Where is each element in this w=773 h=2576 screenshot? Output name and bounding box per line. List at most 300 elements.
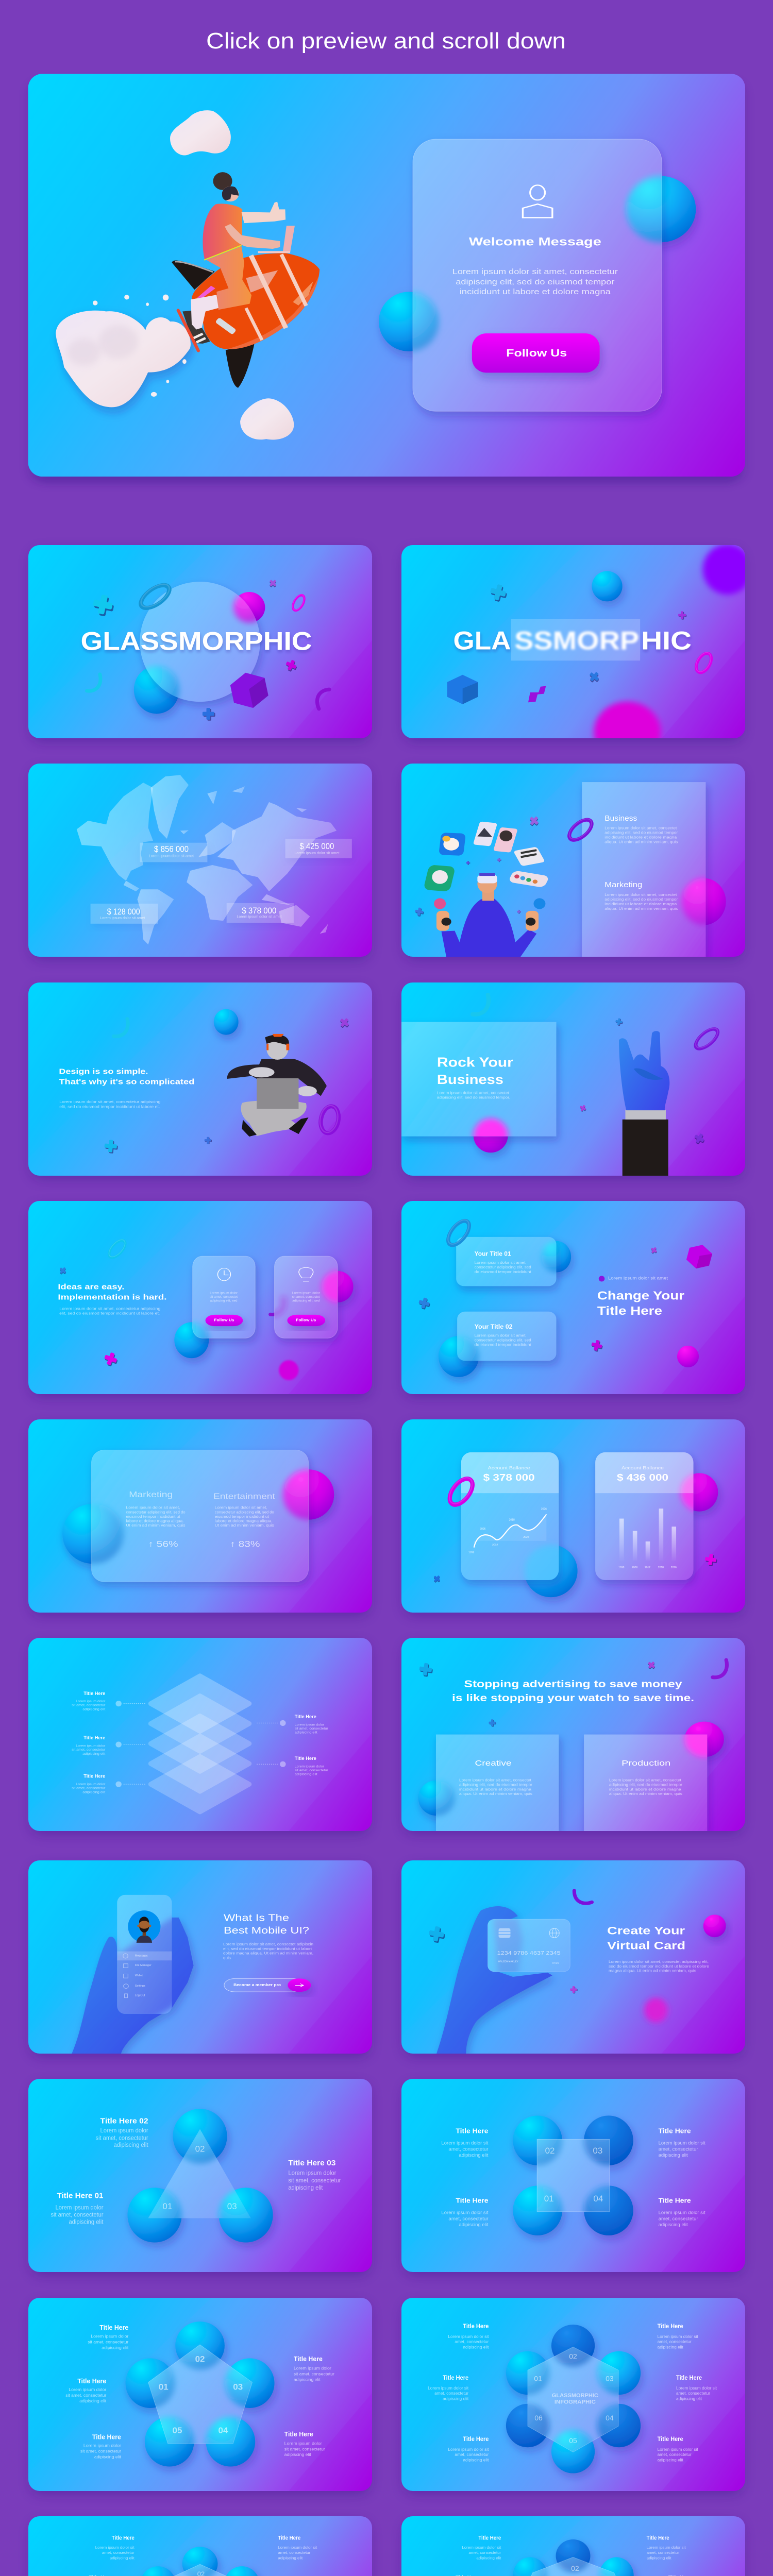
heading: quote — [452, 1679, 694, 1704]
menu: phone items: Wallet — [135, 1974, 143, 1977]
text block: creative body: incididunt ut labore et dolore magna — [459, 1787, 532, 1791]
text block: marketing — [604, 880, 678, 911]
text block: bulb body: Lorem ipsum dolor — [292, 1291, 321, 1295]
text block: rock body: Lorem ipsum dolor sit amet, consectet — [437, 1090, 510, 1095]
label: title 03 — [288, 2159, 341, 2191]
label: title 02: Title Here 02 — [100, 2117, 148, 2126]
icon: blurred magenta sphere — [644, 1998, 668, 2023]
text block: marketing: incididunt ut labore et dolore magna — [604, 902, 677, 906]
label: title 01 — [51, 2192, 104, 2226]
text block: design body — [59, 1099, 160, 1109]
panel: glass card bar chart — [401, 1419, 745, 1613]
stat: 56 percent: ↑ 56% — [148, 1539, 178, 1549]
label: bottom right: amet, consectetur — [659, 2216, 698, 2222]
heading: rock your business: Business — [437, 1072, 503, 1087]
icon: purple hexagon — [228, 669, 270, 711]
title: Click on preview and scroll down — [206, 28, 566, 54]
number: 01: 01 — [544, 2194, 554, 2204]
text block: mobile body: elit, sed do eiusmod tempor incididunt ut labort — [223, 1946, 312, 1951]
marker: right 2 — [257, 1761, 286, 1767]
label: bottom left: Lorem ipsum dolor sit — [441, 2210, 489, 2215]
label: title 02: adipiscing elit — [114, 2142, 148, 2148]
heading: quote: Stopping advertising to save money — [464, 1679, 682, 1690]
heading: sharp end: HIC — [641, 626, 692, 655]
panel: slide design is simple — [28, 982, 372, 1179]
text block: design quote: Design is so simple. — [59, 1067, 148, 1076]
panel: slide world map — [28, 764, 372, 960]
label: 02: adipiscing elit — [102, 2345, 129, 2350]
label: 01: sit amet, consectetur — [65, 2393, 106, 2398]
panel: glass column — [401, 764, 745, 957]
heading: best mobile ui: What Is The — [224, 1912, 289, 1923]
text block: production: Production — [621, 1759, 670, 1768]
chart: bar chart: 2012 — [645, 1566, 650, 1569]
panel: glass circle — [28, 545, 372, 738]
label: 04: adipiscing elit — [284, 2452, 311, 2457]
text block: clock body — [210, 1291, 238, 1302]
label: 04: sit amet, consectetur — [284, 2446, 325, 2451]
label: left 2: sit amet, consectetur — [72, 1748, 106, 1752]
panel: slide glassmorphic circle — [28, 545, 372, 742]
icon: magenta ring — [693, 650, 715, 675]
label: left 1: sit amet, consectetur — [72, 1704, 106, 1707]
text block: title 02: do eiusmod tempor incididunt — [475, 1342, 531, 1347]
icon: blue sphere — [62, 1504, 124, 1564]
chart: line chart: 2018 — [509, 1518, 515, 1521]
illustration: hand — [72, 1918, 194, 2054]
label: 03: amet, consectetur — [647, 2550, 679, 2555]
label: 03 — [278, 2535, 317, 2560]
icon: top cloud — [170, 110, 231, 156]
illustration: rock hand — [619, 1031, 669, 1177]
panel: glass square — [401, 2079, 745, 2272]
button: follow us — [287, 1315, 325, 1326]
text block: marketing: Marketing — [604, 880, 642, 889]
panel: slide pentagon infographic — [28, 2298, 372, 2495]
callout: 425 000: $ 425 000 — [299, 841, 334, 851]
label: bottom right: adipiscing elit — [659, 2222, 688, 2228]
chart: line chart: 2012 — [492, 1544, 498, 1547]
text block: balance: $ 378 000 — [483, 1472, 535, 1483]
text block: marketing: Lorem ipsum dolor sit amet, consectet — [604, 892, 677, 897]
icon: magenta sphere — [474, 1118, 508, 1153]
illustration: vr person — [414, 858, 545, 957]
icon: magenta sphere — [233, 592, 265, 623]
panel: slide virtual card — [401, 1860, 745, 2057]
panel: slide business marketing — [401, 764, 745, 960]
label: 06 — [448, 2435, 489, 2463]
text block: clock body: sit amet, consectet — [210, 1295, 238, 1299]
marker: left 1 — [115, 1701, 146, 1706]
callout: 128 000 — [91, 904, 158, 924]
icon: chip — [499, 1928, 510, 1938]
text block: ideas body — [59, 1306, 160, 1315]
icon: blue hexagon — [447, 675, 478, 704]
icon: magenta sphere — [681, 1473, 718, 1512]
heading: rock your business: Rock Your — [437, 1055, 513, 1070]
label: left 2: adipiscing elit — [82, 1752, 105, 1756]
text block: design body: Lorem ipsum dolor sit amet, consectetur adipiscing — [59, 1099, 160, 1104]
label: 04: adipiscing elit — [676, 2397, 702, 2401]
label: title 03: adipiscing elit — [288, 2185, 323, 2191]
text block: business: Lorem ipsum dolor sit amet, consectet — [604, 826, 677, 831]
panel: glass card line chart — [401, 1419, 745, 1613]
number: 02: 02 — [195, 2144, 205, 2154]
label: left 1: adipiscing elit — [82, 1707, 105, 1711]
label: 04 — [284, 2430, 325, 2457]
text block: title 01: do eiusmod tempor incididunt — [475, 1269, 531, 1274]
icon: teal plus — [91, 593, 116, 618]
icon: purple plus — [570, 1986, 578, 1993]
number: 02: 02 — [545, 2146, 555, 2156]
icon: blurred purple sphere — [703, 544, 752, 595]
label: left 2: Title Here — [83, 1735, 105, 1741]
callout: 425 000 — [285, 839, 352, 858]
panel: hero slide — [28, 74, 745, 483]
label: 05: adipiscing elit — [658, 2458, 683, 2463]
icon: blue cross — [432, 1574, 442, 1584]
button: follow us — [206, 1315, 243, 1326]
marker: left 2 — [115, 1741, 146, 1748]
panel: slide stopping advertising — [401, 1638, 745, 1835]
heading: glassmorphic: GLASSMORPHIC — [80, 627, 312, 656]
icon: purple crescent — [315, 689, 332, 709]
text block: creative: Creative — [475, 1759, 512, 1768]
text block: marketing body: Lorem ipsum dolor sit amet, — [126, 1505, 180, 1510]
text block: balance: Account Ballance — [488, 1466, 530, 1470]
heading: sharp start: GLA — [453, 626, 511, 655]
numbers: hexagon: 05 — [569, 2436, 577, 2445]
icon: blue sphere — [592, 571, 623, 601]
label: 02: Title Here — [463, 2323, 489, 2330]
text block: design body: elit, sed do eiusmod tempor incididunt ut labore et. — [59, 1105, 160, 1109]
label: 03: Title Here — [278, 2535, 300, 2541]
label: 02: amet, consectetur — [102, 2550, 135, 2555]
text block: creative body: adipiscing elit, sed do eiusmod tempor — [459, 1783, 533, 1787]
text block: card body — [609, 1959, 709, 1973]
text block: kicker: Lorem ipsum dolor sit amet — [608, 1276, 668, 1281]
text block: marketing body — [126, 1505, 186, 1528]
panel: slide layers — [28, 1638, 372, 1835]
icon: spheres — [494, 2539, 651, 2576]
panel: slide square infographic — [401, 2079, 745, 2276]
icon: magenta sphere — [682, 878, 726, 925]
callout: 378 000: Lorem ipsum dolor sit amet — [237, 916, 281, 919]
text block: cardholder: ORLEEN MAKLEY — [498, 1960, 518, 1962]
label: left 2: Lorem ipsum dolor — [76, 1744, 106, 1748]
label: left 2 — [72, 1735, 106, 1756]
text block: welcome body: incididunt ut labore et dolore magna — [460, 287, 611, 296]
label: top left: adipiscing elit — [459, 2153, 489, 2158]
label: top left: amet, consectetur — [448, 2146, 488, 2152]
chart: line chart: 2006 — [480, 1528, 486, 1531]
label: title 02: sit amet, consectetur — [96, 2135, 148, 2141]
text block: business: aliqua. Ut enim ad minim veniam, quis — [604, 839, 678, 844]
label: 01: Title Here — [77, 2377, 106, 2385]
stat: 83 percent: ↑ 83% — [230, 1539, 260, 1549]
icon: cyan plus — [418, 1662, 433, 1677]
text block: mobile body: quis — [223, 1955, 231, 1960]
label: 02 — [95, 2535, 135, 2560]
text block: card number: 1234 9786 4637 2345 — [497, 1951, 561, 1956]
icon: blue plus — [203, 708, 215, 721]
icon: magenta sphere — [703, 1914, 726, 1937]
callout: 378 000 — [227, 903, 294, 923]
icon: magenta hexagon — [685, 1242, 714, 1272]
icon: purple ring — [317, 1104, 341, 1135]
icon: magenta plus — [284, 658, 299, 673]
text block: business: adipiscing elit, sed do eiusmod tempor — [604, 831, 678, 835]
label: right 2: sit amet, consectetur — [295, 1769, 329, 1772]
label: top left: Lorem ipsum dolor sit — [441, 2140, 489, 2146]
icon: blue sphere left — [379, 292, 439, 351]
number: 01: 01 — [162, 2201, 172, 2211]
label: 01: adipiscing elit — [443, 2397, 469, 2401]
icon: cyan crescent — [114, 1019, 128, 1037]
label: 01: Title Here — [443, 2374, 468, 2381]
text block: mobile body: dolore magna aliqua. Ut enim ad minim veniam, — [223, 1951, 313, 1956]
panel: glass pentagon — [28, 2298, 372, 2491]
heading: virtual card — [607, 1925, 685, 1952]
label: 05 — [658, 2435, 698, 2463]
icon: blue sphere — [214, 1009, 239, 1035]
panel: glass square — [401, 982, 745, 1176]
label: 03: Lorem ipsum dolor sit — [278, 2545, 317, 2550]
icon: purple crescent — [270, 1298, 284, 1314]
text block: production body — [609, 1778, 683, 1796]
panel: glass credit card — [401, 1860, 745, 2054]
button: become member — [224, 1978, 311, 1992]
panel: slide ideas are easy — [28, 1201, 372, 1398]
icon: small plus — [678, 612, 686, 620]
label: title 01: adipiscing elit — [69, 2219, 104, 2226]
label: 03: amet, consectetur — [658, 2340, 692, 2344]
label: 06: Lorem ipsum dolor sit — [448, 2447, 489, 2452]
illustration: app icons — [423, 821, 550, 892]
icon: blue sphere right — [626, 176, 696, 242]
label: left 1 — [72, 1691, 106, 1711]
text block: marketing body: consectetur adipiscing elit, sed do — [126, 1510, 185, 1515]
heading: rock your business — [437, 1055, 513, 1087]
panel: glass welcome card — [28, 74, 745, 477]
text block: production body: incididunt ut labore et dolore magna — [609, 1787, 682, 1791]
icon: cyan crescent — [473, 995, 489, 1014]
icon: blue sphere — [524, 1545, 578, 1597]
chart: line chart: 1998 — [468, 1551, 474, 1554]
label: 02: sit amet, consectetur — [88, 2339, 128, 2344]
text block: design quote — [59, 1067, 194, 1087]
illustration: hand — [436, 1906, 552, 2054]
label: bottom right: Lorem ipsum dolor sit — [659, 2210, 705, 2215]
label: title 02: Lorem ipsum dolor — [100, 2128, 148, 2134]
label: 02: Lorem ipsum dolor sit — [462, 2545, 501, 2550]
panel: glass heptagon — [28, 2516, 372, 2576]
label: right 2: Lorem ipsum dolor — [295, 1765, 325, 1768]
text block: ideas body: elit, sed do eiusmod tempor incididunt ut labore et. — [59, 1311, 160, 1315]
label: 04: amet, consectetur — [676, 2391, 710, 2396]
button: follow us: Follow Us — [296, 1318, 316, 1323]
text block: clock body: Lorem ipsum dolor — [210, 1291, 238, 1295]
icon: purple cross — [649, 1246, 659, 1255]
icon: bulb — [299, 1267, 313, 1281]
panel: glass card clock — [28, 1201, 372, 1394]
text block: entertainment body — [215, 1505, 274, 1528]
label: 05: adipiscing elit — [94, 2454, 122, 2459]
icon: blurred magenta sphere — [279, 1360, 298, 1380]
illustration: rocket and rider — [172, 172, 320, 388]
text block: marketing body: eiusmod tempor incididunt ut — [126, 1514, 180, 1519]
text block: entertainment body: consectetur adipiscing elit, sed do — [215, 1510, 274, 1515]
heading: welcome message: Welcome Message — [469, 235, 601, 248]
label: 02 — [448, 2323, 489, 2350]
heading: center text: INFOGRAPHIC — [554, 2399, 596, 2405]
text block: entertainment body: eiusmod tempor incididunt ut — [215, 1514, 270, 1519]
icon: zigzag — [528, 686, 546, 702]
panel: glass creative — [401, 1638, 745, 1832]
text block: expiry: 07/26 — [552, 1962, 559, 1965]
icon: purple ring — [692, 1025, 721, 1052]
text block: marketing body: Ut enim ad minim veniam, quis — [126, 1523, 186, 1528]
menu: phone items: Messages — [135, 1955, 148, 1958]
panel: glass card bulb — [28, 1201, 372, 1394]
label: title 03: Title Here 03 — [288, 2159, 335, 2167]
label: 03: amet, consectetur — [278, 2550, 311, 2555]
panel: glass phone — [28, 1860, 372, 2054]
text block: entertainment body: labore et dolore magna aliqua. — [215, 1518, 273, 1523]
label: right 2 — [295, 1756, 329, 1776]
icon: spheres — [130, 2547, 270, 2576]
label: 06: amet, consectetur — [455, 2452, 489, 2457]
icon: magenta sphere — [677, 1346, 699, 1367]
panel: slide triangle infographic — [28, 2079, 372, 2276]
chart: bar chart: 2026 — [671, 1566, 677, 1569]
label: 02: adipiscing elit — [476, 2555, 501, 2560]
label: 02: adipiscing elit — [463, 2345, 489, 2350]
numbers: pentagon: 04 — [219, 2426, 228, 2435]
label: 02: amet, consectetur — [455, 2340, 489, 2344]
icon: spheres — [126, 2321, 275, 2467]
text block: production body: adipiscing elit, sed do eiusmod tempor — [609, 1783, 683, 1787]
panel: slide marketing entertainment — [28, 1419, 372, 1616]
chart: stacked glass layers — [150, 1676, 249, 1812]
label: bottom left: amet, consectetur — [448, 2216, 488, 2222]
label: right 2: Title Here — [295, 1756, 316, 1761]
label: left 3: adipiscing elit — [82, 1790, 105, 1794]
text block: marketing: adipiscing elit, sed do eiusmod tempor — [604, 897, 678, 902]
icon: magenta plus — [590, 1339, 604, 1353]
panel: glass card — [28, 1419, 372, 1613]
icon: blue sphere bottom — [439, 1336, 479, 1377]
label: 04 — [676, 2374, 717, 2401]
icon: blue plus — [417, 1297, 431, 1311]
text block: business: Business — [604, 814, 637, 823]
label: title 01: sit amet, consectetur — [51, 2212, 104, 2218]
text block: marketing: aliqua. Ut enim ad minim veniam, quis — [604, 906, 678, 911]
chart: bar chart — [618, 1509, 677, 1569]
label: 03 — [647, 2535, 686, 2560]
panel: slide glass blur title — [401, 544, 752, 763]
panel: glass octagon — [401, 2516, 745, 2576]
text block: title 02 — [475, 1323, 531, 1347]
callout: 378 000: $ 378 000 — [242, 906, 276, 916]
text block: ideas quote: Implementation is hard. — [58, 1293, 166, 1301]
callout: 425 000: Lorem ipsum dolor sit amet — [294, 852, 339, 855]
label: 01: Lorem ipsum dolor sit — [428, 2386, 469, 2391]
icon: blurred magenta sphere — [594, 702, 661, 763]
icon: bottom cloud — [240, 398, 294, 440]
heading: change your title — [597, 1289, 684, 1317]
icon: blue cross — [58, 1266, 68, 1276]
text block: production body: Lorem ipsum dolor sit amet, consectet — [609, 1778, 681, 1783]
number: 03: 03 — [227, 2201, 237, 2211]
text block: title 02: consectetur adipiscing elit, sed — [475, 1337, 531, 1342]
label: 05: Lorem ipsum dolor sit — [658, 2447, 698, 2452]
icon: cyan plus — [104, 1139, 119, 1154]
icon: purple crescent — [713, 1660, 727, 1677]
icon: plus — [527, 814, 541, 828]
number: 04: 04 — [593, 2194, 603, 2204]
text block: title 02: Your Title 02 — [475, 1323, 513, 1330]
heading: virtual card: Virtual Card — [607, 1940, 685, 1952]
panel: glass title 02 — [401, 1201, 745, 1394]
icon: globe — [549, 1928, 559, 1938]
icon: spheres — [127, 2109, 273, 2243]
text block: marketing: Marketing — [129, 1490, 173, 1499]
text block: bulb body: adipiscing elit, sed — [292, 1299, 320, 1302]
icon: crescent — [574, 1889, 592, 1904]
numbers: hexagon: 02 — [569, 2352, 577, 2360]
label: bottom right — [659, 2196, 705, 2228]
label: left 3: Title Here — [83, 1773, 105, 1779]
label: right 1: sit amet, consectetur — [295, 1727, 329, 1731]
panel: glass triangle — [28, 2079, 372, 2272]
icon: magenta plus — [704, 1553, 718, 1567]
numbers: pentagon — [159, 2354, 243, 2435]
label: title 03: sit amet, consectetur — [288, 2178, 341, 2184]
text block: card body: Lorem ipsum dolor sit amet, consectet adipiscing elit, — [609, 1959, 709, 1964]
heading: quote: is like stopping your watch to save time. — [452, 1693, 694, 1704]
label: bottom left — [441, 2196, 489, 2228]
label: 01: Lorem ipsum dolor — [69, 2387, 106, 2392]
chart: bar chart: 1998 — [618, 1566, 625, 1569]
text block: ideas quote — [58, 1282, 166, 1301]
label: bottom left: Title Here — [456, 2196, 488, 2204]
icon: particles — [93, 295, 187, 397]
text block: title 02: Lorem ipsum dolor sit amet, — [475, 1333, 527, 1338]
label: 03: adipiscing elit — [658, 2345, 683, 2350]
button: follow us: Follow Us — [214, 1318, 234, 1323]
label: 01: adipiscing elit — [79, 2398, 107, 2403]
icon: blue cross — [587, 670, 602, 685]
panel: slide change your title — [401, 1201, 745, 1398]
chart: world map — [77, 775, 337, 944]
text block: design quote: That's why it's so complicated — [59, 1078, 194, 1087]
numbers: hexagon: 03 — [606, 2374, 614, 2382]
icon: user — [523, 185, 552, 217]
menu: phone items: File Manager — [135, 1964, 152, 1967]
text block: clock body: adipiscing elit, sed — [210, 1299, 238, 1302]
icon: magenta sphere — [283, 1469, 334, 1520]
icon: cyan ring — [106, 1237, 128, 1260]
icon: magenta ring — [290, 593, 307, 613]
callout: 856 000: $ 856 000 — [154, 844, 189, 854]
icon: cyan plus — [428, 1925, 446, 1944]
label: top right: Lorem ipsum dolor sit — [659, 2140, 705, 2146]
icon: blue plus — [205, 1137, 212, 1144]
numbers: hexagon: 06 — [534, 2414, 543, 2422]
label: 05: amet, consectetur — [658, 2452, 692, 2457]
label: 02: Lorem ipsum dolor sit — [95, 2545, 135, 2550]
